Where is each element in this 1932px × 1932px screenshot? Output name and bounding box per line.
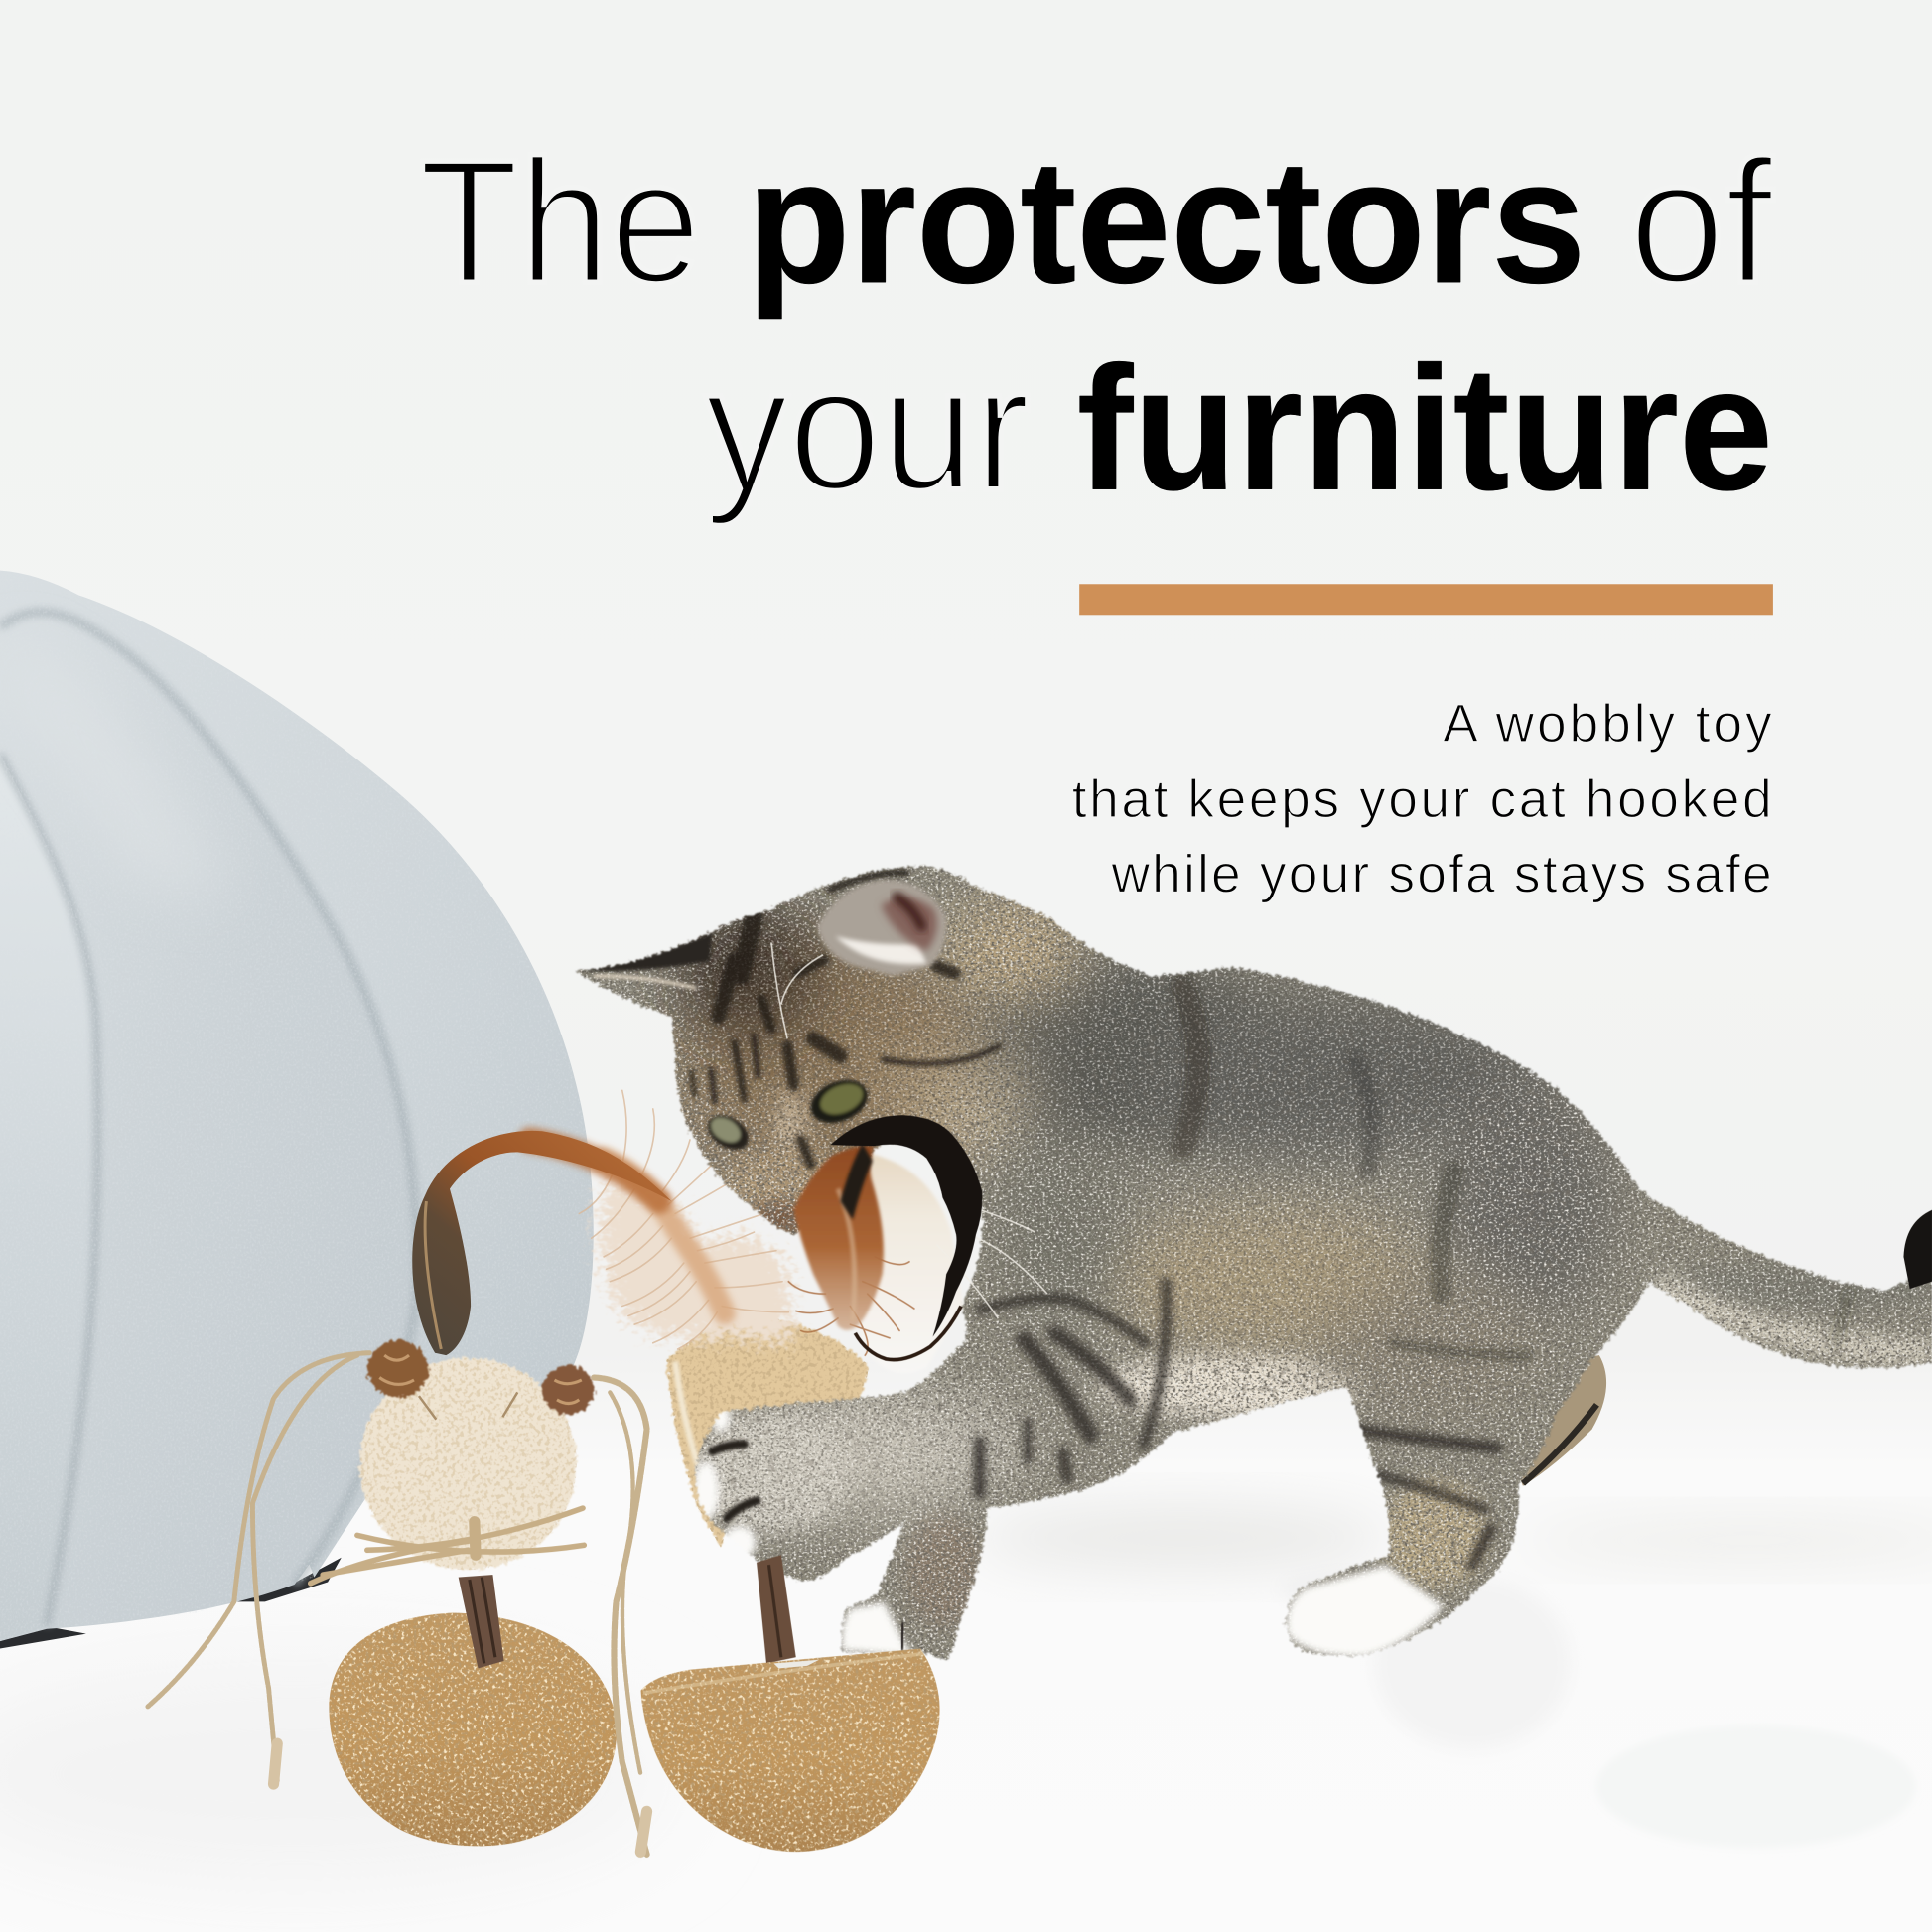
title: protectors: [747, 122, 1586, 320]
title: furniture: [1077, 330, 1773, 527]
catnip seed beads: [367, 1340, 594, 1415]
title: your: [705, 330, 1031, 527]
twine bow: [311, 1508, 584, 1584]
cat white paws: [692, 1402, 1445, 1657]
title: of: [1629, 122, 1774, 320]
title: The: [419, 122, 701, 320]
left cork half ball: [321, 1601, 628, 1861]
cat white chest: [857, 1152, 964, 1373]
tail tip: [1903, 1210, 1932, 1289]
right toy stick: [757, 1555, 796, 1663]
fur colour tints: [690, 924, 1516, 1528]
cat: [542, 838, 1932, 1676]
jute strings: [148, 1353, 647, 1855]
feather fluff barbs: [579, 1090, 788, 1349]
feather fluff: [601, 1182, 791, 1343]
large tan feather: [412, 1090, 791, 1355]
subtitle text: that keeps your cat hooked: [1072, 770, 1772, 829]
subtitle text: [1072, 695, 1772, 904]
fur noise: [542, 838, 1932, 1676]
accent bar: [1079, 584, 1773, 615]
left toy: [148, 1340, 647, 1861]
fur stripes: [691, 873, 1000, 1165]
cat bed cushion: [0, 567, 598, 1651]
left toy stick: [459, 1575, 504, 1668]
far hind leg: [1497, 1355, 1606, 1486]
black feather: [830, 1115, 982, 1337]
right cork half ball: [641, 1648, 940, 1853]
cat eyes: [702, 1072, 874, 1157]
title: [419, 122, 1774, 527]
feather in cat mouth: [788, 1115, 982, 1360]
cat right ear: [817, 880, 946, 976]
left loofah disc: [357, 1355, 579, 1573]
cat whisker lines: [771, 942, 1047, 1318]
cat body with fur: [542, 838, 1932, 1676]
feather quill arc: [412, 1131, 671, 1355]
right toy loofah top: [665, 1318, 870, 1547]
brown feather barbs: [788, 1257, 914, 1355]
subtitle text: A wobbly toy: [1443, 695, 1772, 754]
cat left ear: [579, 932, 712, 988]
subtitle text: while your sofa stays safe: [1110, 846, 1772, 904]
